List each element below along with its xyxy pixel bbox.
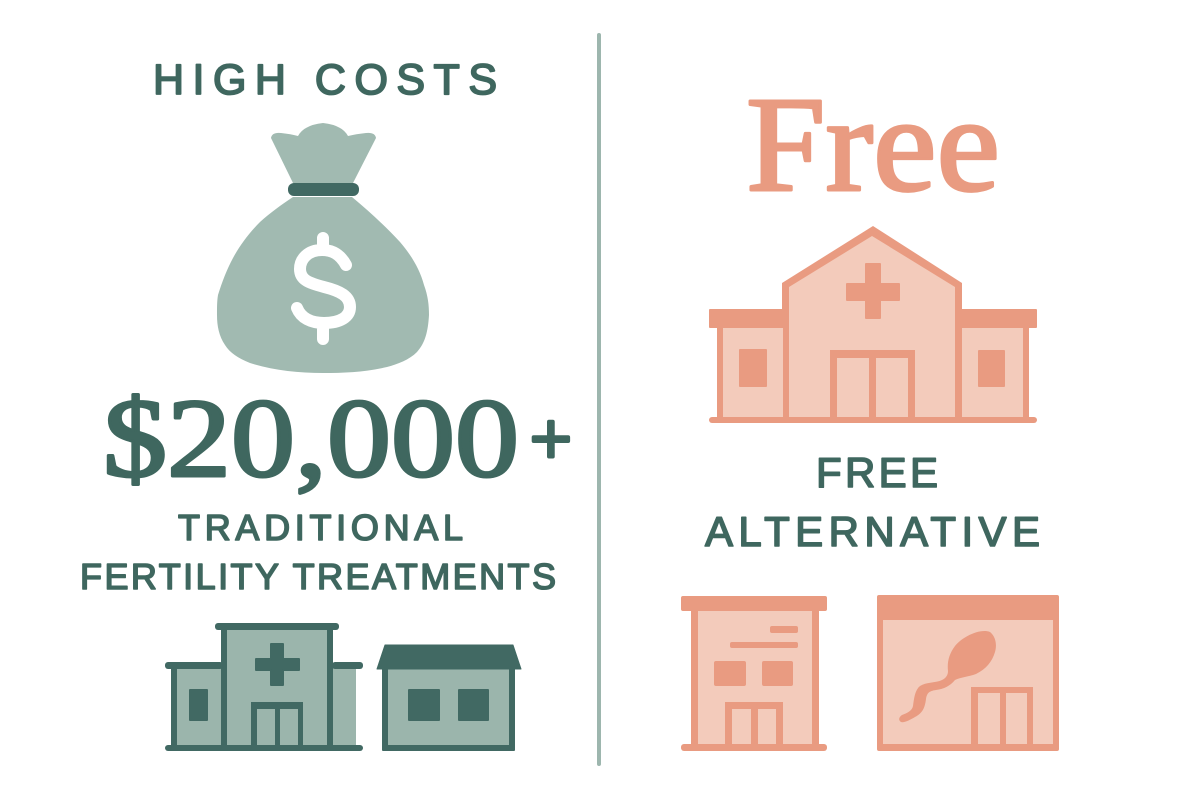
heading: high costs: HIGH COSTS: [153, 56, 497, 104]
big number: $20,000+: +: [530, 399, 572, 481]
icon: green clinic: [377, 645, 521, 751]
label: free alternative: [705, 449, 1040, 555]
label: free alternative: FREE: [816, 449, 938, 496]
heading: free: Free: [746, 70, 1000, 220]
icon: money bag: [217, 123, 429, 373]
icon: salmon clinic with sperm: [877, 595, 1059, 751]
big number: $20,000+: $20,000: [103, 377, 519, 501]
label: traditional fertility treatments: [80, 507, 556, 597]
panel: high costs: [80, 56, 572, 751]
icon: salmon hospital: [709, 226, 1037, 423]
icon: green hospital: [165, 623, 363, 751]
label: free alternative: ALTERNATIVE: [705, 508, 1040, 555]
panel: free alternative: [681, 70, 1059, 751]
label: traditional fertility treatments: FERTILITY TREATMENTS: [80, 556, 556, 597]
icon: salmon office building: [681, 596, 827, 751]
label: traditional fertility treatments: TRADITIONAL: [178, 507, 463, 548]
